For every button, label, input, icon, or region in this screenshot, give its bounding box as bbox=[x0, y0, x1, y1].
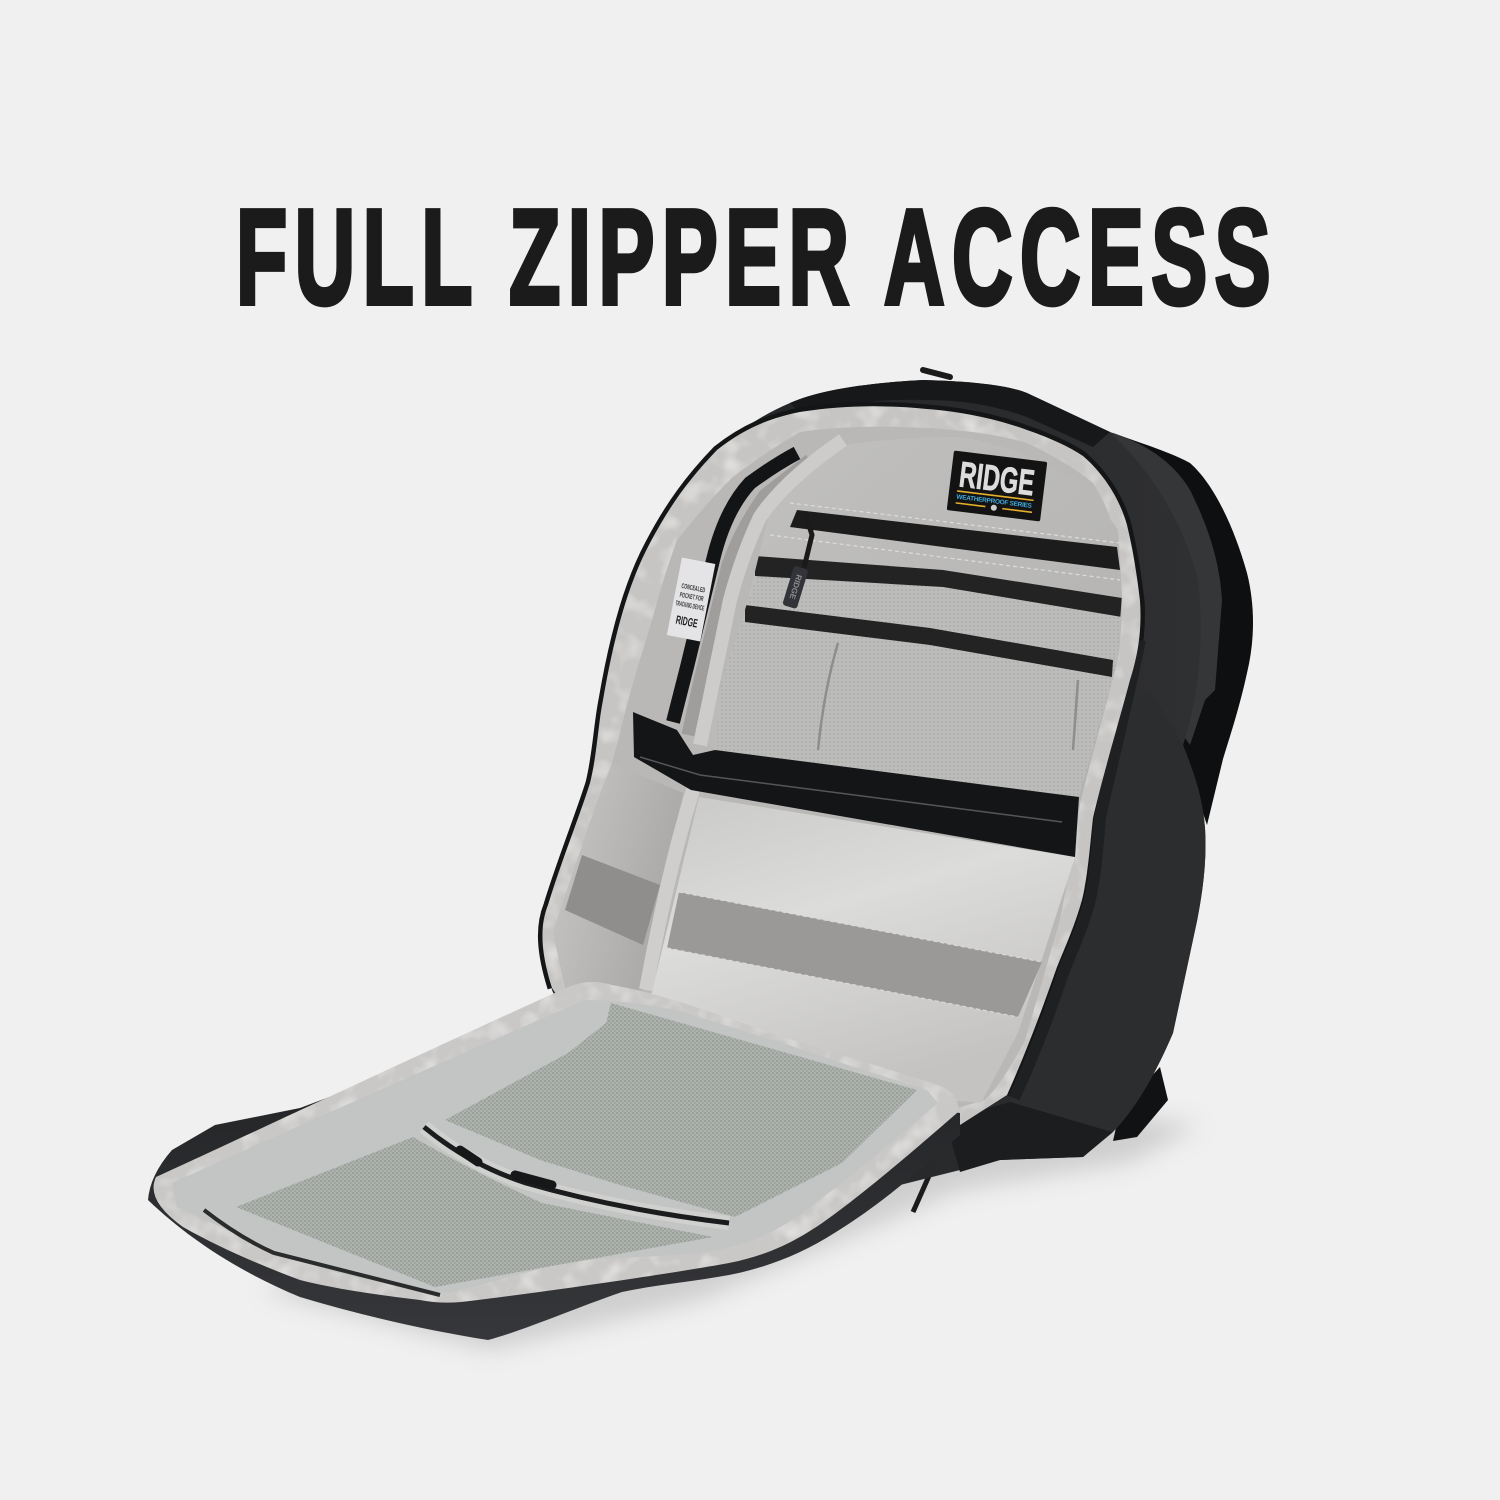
cord pull bbox=[923, 370, 950, 377]
flap zipper tape bbox=[424, 1127, 729, 1223]
organiser mesh pocket bbox=[715, 567, 1122, 797]
strap lower bbox=[745, 605, 1113, 677]
back padding bbox=[1113, 433, 1253, 825]
backpack body bbox=[544, 380, 1206, 1230]
hang tag: CONCEALED bbox=[681, 583, 706, 594]
left black zipper bbox=[673, 453, 797, 722]
hang tag bbox=[667, 557, 715, 642]
mesh upper bbox=[445, 1003, 917, 1217]
pocket stitching bbox=[640, 757, 1062, 822]
organiser straps bbox=[745, 503, 1122, 750]
hang tag: RIDGE bbox=[675, 613, 699, 631]
interior rim bbox=[542, 406, 1141, 1125]
left wall bbox=[553, 763, 683, 990]
shoulder strap bbox=[1113, 1067, 1168, 1141]
lower flap zipper bbox=[204, 1210, 440, 1295]
flap zipper band bbox=[424, 1127, 729, 1223]
flap satin bbox=[172, 1000, 938, 1293]
velcro stitching bbox=[667, 892, 1042, 1017]
bottom panel bbox=[945, 1102, 1112, 1172]
hang tag: POCKET FOR bbox=[679, 592, 704, 603]
ground shadow bbox=[260, 1100, 1200, 1350]
backpack bbox=[148, 370, 1253, 1350]
lower side panel bbox=[1010, 690, 1206, 1132]
hang tag: TRACKING DEVICE bbox=[675, 600, 705, 613]
interior lining bbox=[553, 427, 1122, 1110]
mesh lower bbox=[236, 1137, 713, 1287]
strap middle bbox=[755, 556, 1122, 617]
zip pocket bbox=[790, 510, 1120, 570]
centre piping bbox=[646, 790, 693, 990]
brand label: RIDGE bbox=[957, 454, 1037, 503]
elastic pocket bbox=[633, 712, 1079, 857]
pleats bbox=[818, 643, 1078, 750]
organiser satin bbox=[705, 437, 1122, 800]
brand label: WEATHERPROOF SERIES bbox=[956, 494, 1033, 510]
rim zipper bbox=[542, 406, 1141, 1095]
flap strap bbox=[913, 1160, 936, 1212]
velcro band bbox=[667, 892, 1042, 1017]
flap zipper pull bbox=[460, 1150, 552, 1185]
lower compartment bbox=[650, 797, 1075, 1103]
organiser piping bbox=[700, 440, 843, 745]
zipper pull: RIDGE bbox=[787, 573, 804, 601]
flap outer shell bbox=[148, 1010, 960, 1340]
satin strip bbox=[688, 460, 810, 735]
zipper pull bbox=[782, 512, 812, 609]
right zipper tape bbox=[1014, 640, 1140, 1098]
top handle pad bbox=[790, 380, 1110, 447]
brand label bbox=[947, 450, 1047, 522]
back panel layers bbox=[1110, 432, 1222, 745]
flap rim bbox=[154, 982, 958, 1303]
stitching bbox=[770, 503, 1120, 580]
left velcro band bbox=[565, 855, 660, 945]
